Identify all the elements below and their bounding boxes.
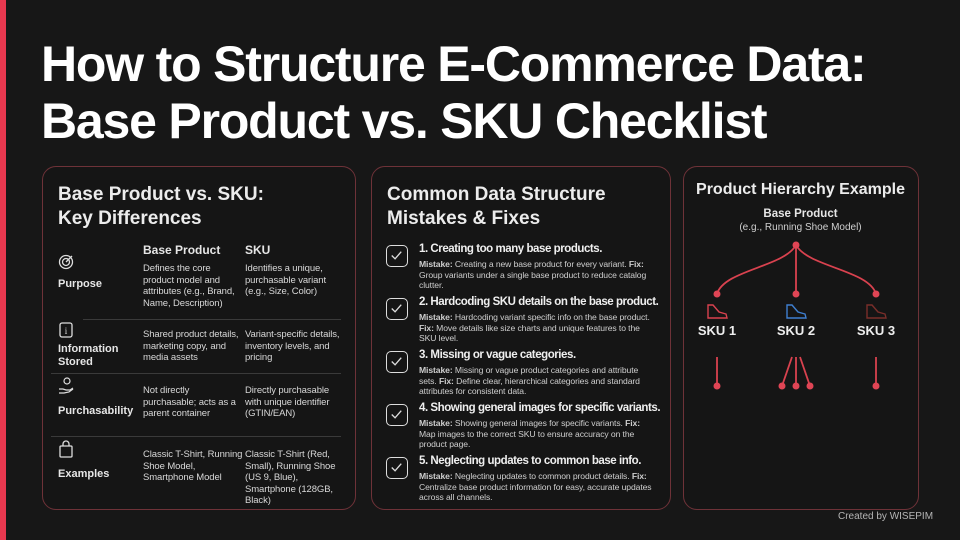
panel heading: Base Product vs. SKU: (58, 184, 264, 205)
panel heading (58, 184, 264, 229)
examples base: Classic T-Shirt, Running Shoe Model, Smartphone Model (143, 449, 242, 483)
row: examples: Examples (58, 468, 109, 480)
column headers: SKU (245, 243, 270, 257)
credit: Created by WISEPIM (838, 511, 933, 522)
item 4: 4. Showing general images for specific variants. (419, 402, 660, 414)
item 3 (386, 349, 640, 396)
column headers: Base Product (143, 243, 220, 257)
item 1: 1. Creating too many base products. (419, 243, 602, 255)
purpose base: Defines the core product model and attributes (e.g., Brand, Name, Description) (143, 263, 235, 308)
icon: bag (59, 440, 73, 458)
title: Base Product vs. SKU Checklist (41, 93, 766, 149)
item 2: Mistake: Hardcoding variant specific info on the base product. Fix: Move details like size charts and unique features to the SKU level. (419, 312, 650, 343)
info sku: Variant-specific details, inventory levels, and pricing (245, 329, 339, 363)
icon: hand coin (59, 377, 74, 394)
purch sku: Directly purchasable with unique identifier (GTIN/EAN) (245, 385, 329, 419)
row: information stored (58, 343, 118, 368)
item 2: 2. Hardcoding SKU details on the base product. (419, 296, 658, 308)
panel heading (387, 184, 606, 229)
icon: target (58, 254, 74, 270)
icon: info (59, 322, 73, 338)
tree diagram: SKU 3 (857, 323, 895, 338)
item 3: Mistake: Missing or vague product categories and attribute sets. Fix: Define clear, hierarchical categories and standard attributes for consistent data. (419, 365, 640, 396)
panel: mistakes & fixes (371, 166, 671, 510)
base product label: (e.g., Running Shoe Model) (739, 222, 862, 233)
item 5: Mistake: Neglecting updates to common product details. Fix: Centralize base product information for easy, accurate updates across all channels. (419, 471, 652, 502)
panel: hierarchy (683, 166, 919, 510)
purch base: Not directly purchasable; acts as a parent container (143, 385, 236, 419)
row: information stored: Information (58, 343, 118, 355)
item 3: 3. Missing or vague categories. (419, 349, 576, 361)
examples sku: Classic T-Shirt (Red, Small), Running Shoe (US 9, Blue), Smartphone (128GB, Black) (245, 449, 335, 506)
tree diagram: SKU 2 (777, 323, 815, 338)
row: purchasability: Purchasability (58, 405, 133, 417)
panel heading: Mistakes & Fixes (387, 208, 540, 229)
panel heading: Key Differences (58, 208, 202, 229)
tree diagram: SKU 1 (698, 323, 736, 338)
item 1 (386, 243, 646, 290)
panel heading: Common Data Structure (387, 184, 606, 205)
item 2 (386, 296, 658, 343)
title: How to Structure E-Commerce Data: (41, 36, 865, 92)
icon: info: i (65, 326, 68, 336)
item 5 (386, 455, 652, 502)
purpose sku: Identifies a unique, purchasable variant (e.g., Size, Color) (245, 263, 326, 297)
tree diagram (698, 242, 895, 390)
item 4: Mistake: Showing general images for specific variants. Fix: Map images to the correct SKU to ensure accuracy on the product page. (419, 418, 640, 449)
panel: key differences (42, 166, 356, 510)
base product label (739, 208, 862, 233)
item 4 (386, 402, 660, 449)
item 1: Mistake: Creating a new base product for every variant. Fix: Group variants under a single base product to reduce catalog clutter. (419, 259, 646, 290)
row: purpose: Purpose (58, 278, 102, 290)
base product label: Base Product (763, 208, 838, 220)
row: information stored: Stored (58, 356, 93, 368)
info base: Shared product details, marketing copy, and media assets (143, 329, 238, 363)
panel heading: Product Hierarchy Example (696, 181, 905, 198)
accent bar (0, 0, 6, 540)
item 5: 5. Neglecting updates to common base info. (419, 455, 641, 467)
title (41, 36, 865, 149)
column headers (143, 243, 270, 257)
